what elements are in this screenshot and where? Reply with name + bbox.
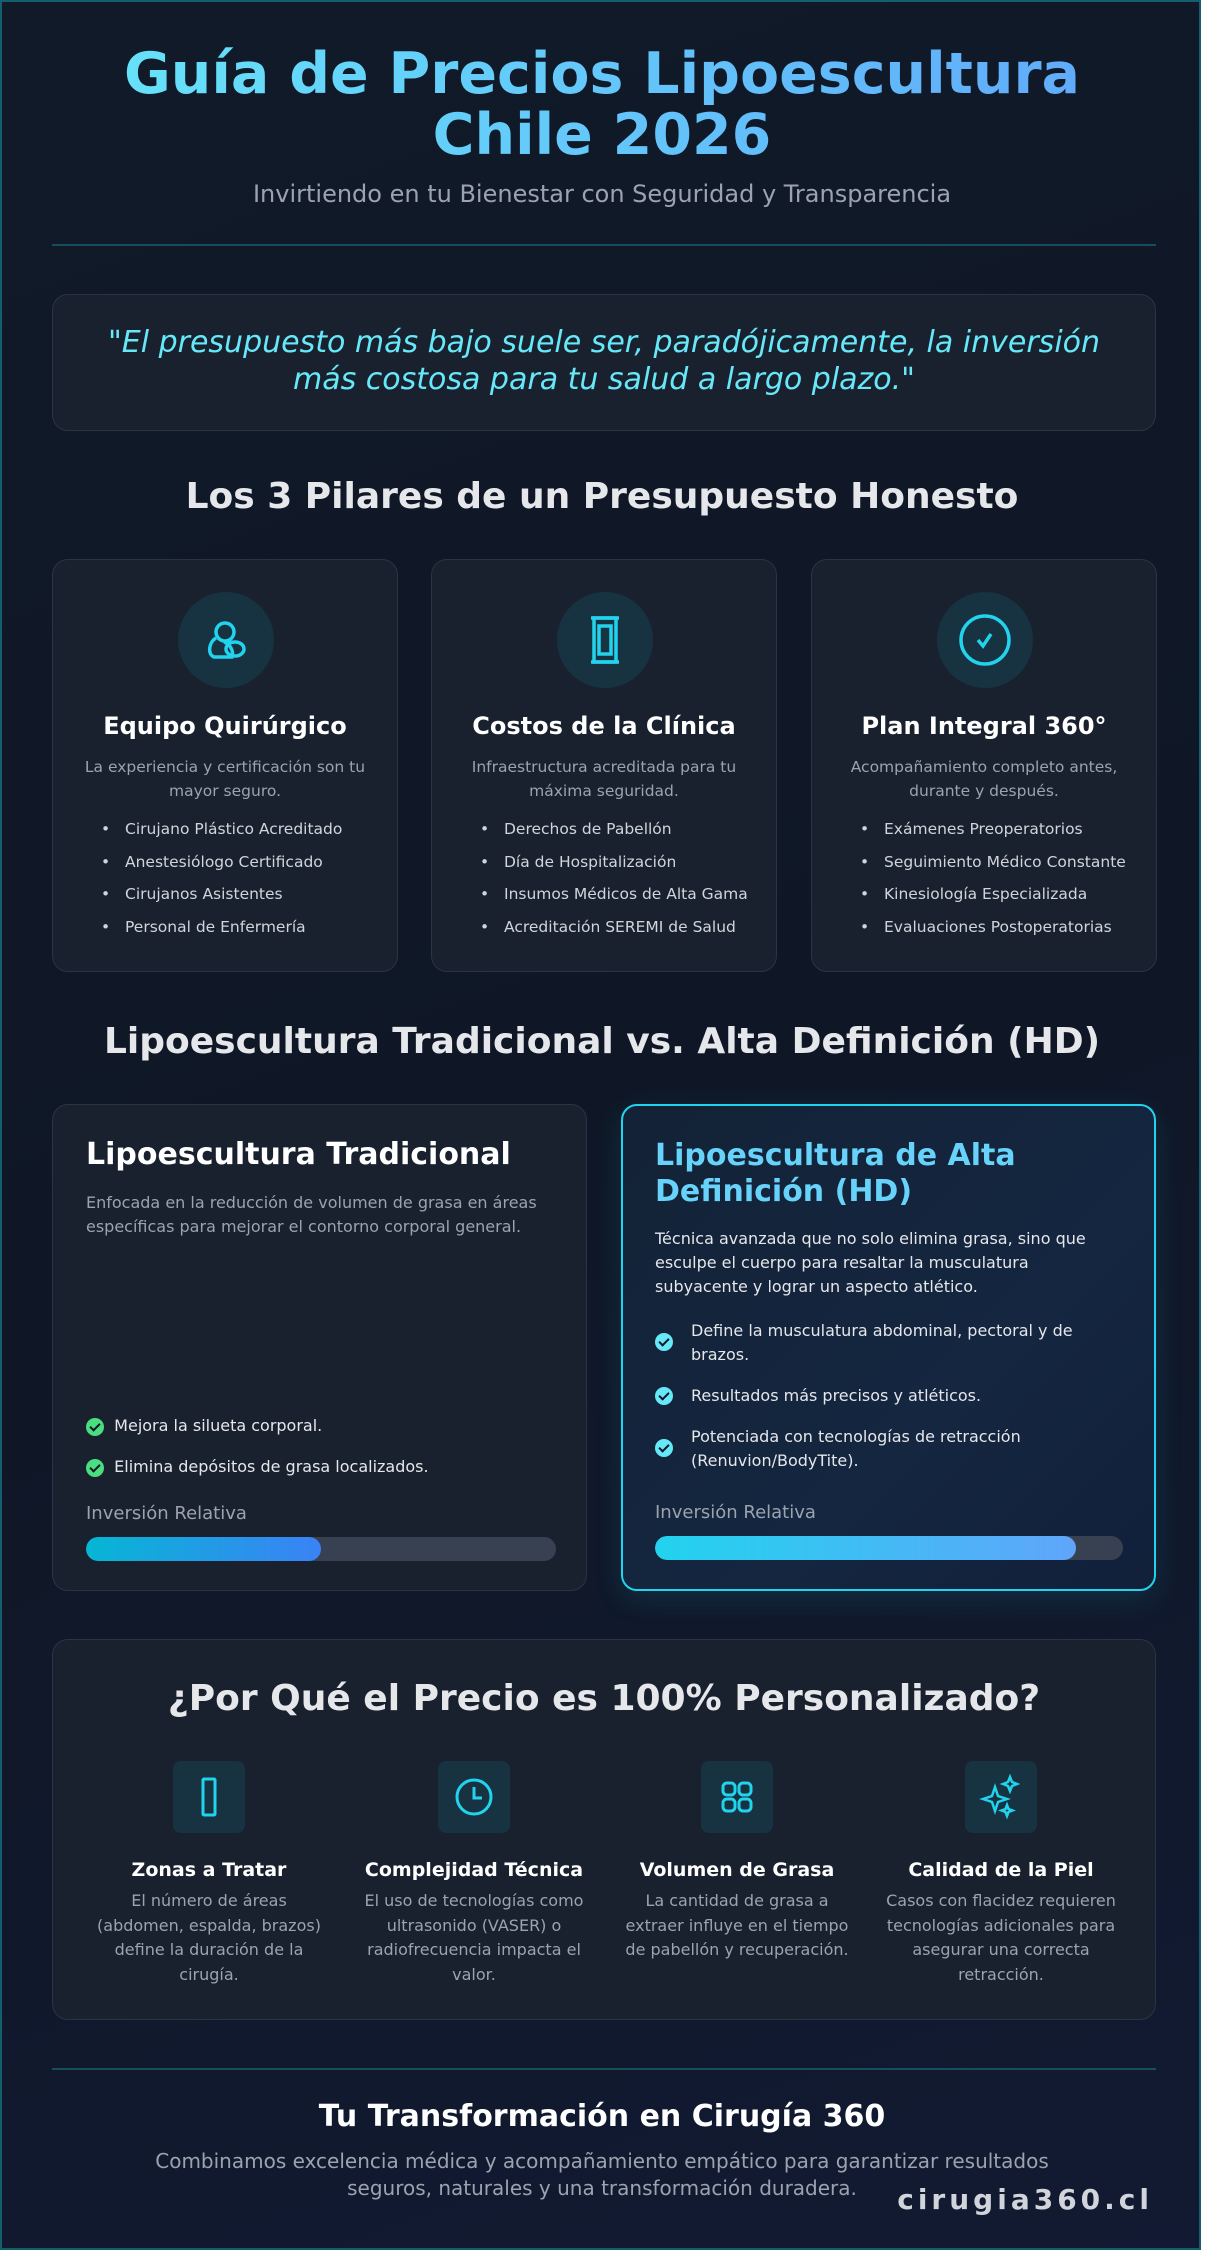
panel: plan integral: Acompañamiento completo antes, durante y después. — [851, 758, 1117, 800]
panel: alta definicion: Técnica avanzada que no solo elimina grasa, sino que esculpe el cuerpo para resaltar la musculatura subyacente y lograr un aspecto atlético. — [655, 1229, 1086, 1296]
icon: check circle — [937, 592, 1033, 688]
panel: equipo quirurgico: La experiencia y certificación son tu mayor seguro. — [85, 758, 365, 800]
checklist HD: Define la musculatura abdominal, pectoral y de brazos. — [691, 1321, 1073, 1364]
checklist HD: Resultados más precisos y atléticos. — [691, 1386, 981, 1405]
panel: plan integral: Seguimiento Médico Constante — [884, 852, 1126, 870]
panel: alta definicion: Inversión Relativa — [655, 1502, 816, 1523]
factor: complejidad: El uso de tecnologías como ultrasonido (VASER) o radiofrecuencia impacta el valor. — [365, 1891, 583, 1984]
title HD — [655, 1138, 1016, 1209]
footer text: Combinamos excelencia médica y acompañamiento empático para garantizar resultados — [155, 2149, 1049, 2173]
factor: complejidad — [365, 1761, 583, 1984]
title HD: Definición (HD) — [655, 1174, 912, 1209]
quote callout — [52, 294, 1156, 431]
title HD: Lipoescultura de Alta — [655, 1138, 1016, 1173]
factor: volumen: Volumen de Grasa — [640, 1859, 834, 1881]
panel: tradicional: Inversión Relativa — [86, 1503, 247, 1524]
panel: plan integral: Exámenes Preoperatorios — [884, 820, 1083, 838]
panel: alta definicion — [621, 1104, 1156, 1591]
factor: volumen — [625, 1761, 849, 1959]
factor: piel: Casos con flacidez requieren tecnologías adicionales para asegurar una correcta retracción. — [886, 1891, 1116, 1984]
checklist tradicional: Mejora la silueta corporal. — [114, 1416, 322, 1435]
panel: equipo quirurgico: Cirujanos Asistentes — [125, 885, 283, 903]
bar: HD — [655, 1536, 1123, 1560]
quote callout: "El presupuesto más bajo suele ser, paradójicamente, la inversión — [108, 325, 1100, 360]
footer text: seguros, naturales y una transformación duradera. — [347, 2176, 857, 2200]
factor: complejidad: Complejidad Técnica — [365, 1859, 583, 1881]
panel: costos clinica: Derechos de Pabellón — [504, 820, 672, 838]
checklist tradicional — [86, 1416, 429, 1477]
checklist HD — [655, 1321, 1073, 1470]
panel: equipo quirurgico: Equipo Quirúrgico — [103, 712, 347, 740]
panel: plan integral: Evaluaciones Postoperatorias — [884, 918, 1112, 936]
heading personalized: ¿Por Qué el Precio es 100% Personalizado? — [168, 1678, 1040, 1719]
icon: building — [557, 592, 653, 688]
panel: costos clinica — [431, 559, 777, 972]
checklist tradicional: Elimina depósitos de grasa localizados. — [114, 1457, 429, 1476]
panel: personalized price — [52, 1639, 1156, 2020]
panel: tradicional — [52, 1104, 587, 1591]
panel: plan integral: Plan Integral 360° — [861, 712, 1107, 740]
subtitle: Invirtiendo en tu Bienestar con Seguridad y Transparencia — [253, 180, 951, 208]
factor: piel — [886, 1761, 1116, 1984]
panel: plan integral: Kinesiología Especializada — [884, 885, 1087, 903]
panel: tradicional: Enfocada en la reducción de volumen de grasa en áreas específicas para mejorar el contorno corporal general. — [86, 1193, 537, 1236]
panel: equipo quirurgico: Personal de Enfermería — [125, 918, 306, 936]
panel: equipo quirurgico — [52, 559, 398, 972]
heading: pillars: Los 3 Pilares de un Presupuesto Honesto — [186, 476, 1018, 517]
panel: costos clinica: Acreditación SEREMI de Salud — [504, 918, 736, 936]
panel: plan integral — [811, 559, 1157, 972]
panel: equipo quirurgico: Cirujano Plástico Acreditado — [125, 820, 342, 838]
factor: zonas: El número de áreas (abdomen, espalda, brazos) define la duración de la cirugía. — [97, 1891, 321, 1984]
panel: costos clinica: Costos de la Clínica — [472, 712, 736, 740]
panel: costos clinica: Insumos Médicos de Alta Gama — [504, 885, 748, 903]
title tradicional: Lipoescultura Tradicional — [86, 1137, 511, 1172]
icon: team — [178, 592, 274, 688]
quote callout: más costosa para tu salud a largo plazo." — [293, 362, 915, 397]
panel: costos clinica: Infraestructura acreditada para tu máxima seguridad. — [472, 758, 736, 800]
checklist HD: Potenciada con tecnologías de retracción (Renuvion/BodyTite). — [691, 1427, 1021, 1470]
title: Chile 2026 — [433, 102, 771, 168]
factor: zonas — [97, 1761, 321, 1984]
footer title: Tu Transformación en Cirugía 360 — [319, 2099, 885, 2134]
brand: cirugia360.cl — [897, 2183, 1153, 2216]
factor: zonas: Zonas a Tratar — [132, 1859, 286, 1881]
title — [2, 44, 1202, 166]
factor: piel: Calidad de la Piel — [908, 1859, 1094, 1881]
footer text — [155, 2149, 1049, 2200]
heading: comparison: Lipoescultura Tradicional vs. Alta Definición (HD) — [104, 1021, 1100, 1062]
panel: costos clinica: Día de Hospitalización — [504, 852, 676, 870]
bar: tradicional — [86, 1537, 556, 1561]
panel: equipo quirurgico: Anestesiólogo Certificado — [125, 852, 323, 870]
title: Guía de Precios Lipoescultura — [124, 41, 1080, 107]
factor: volumen: La cantidad de grasa a extraer influye en el tiempo de pabellón y recuperación. — [625, 1891, 849, 1959]
